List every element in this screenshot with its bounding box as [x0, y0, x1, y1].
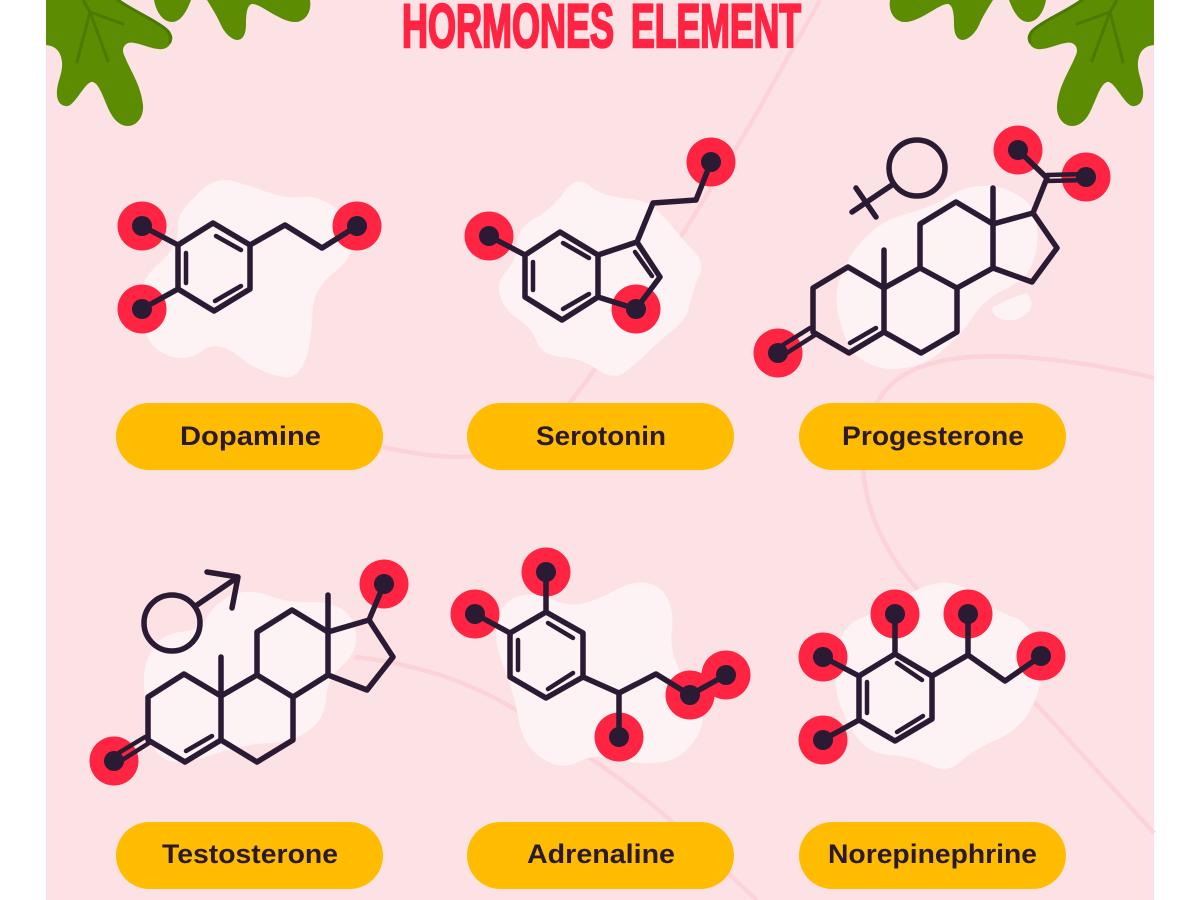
panel: testosterone [90, 560, 408, 889]
background curved lines [355, 0, 1154, 900]
leaves: top left [46, 0, 310, 126]
label pill: progesterone: Progesterone [842, 421, 1024, 451]
blob: serotonin [499, 182, 701, 376]
small blob: progesterone [992, 293, 1031, 320]
label pill: testosterone [116, 822, 383, 889]
female symbol [852, 140, 945, 217]
blob: dopamine [142, 180, 352, 377]
red atoms: testosterone [90, 560, 408, 786]
panel: serotonin [464, 138, 736, 470]
panel: adrenaline [450, 548, 750, 889]
red atoms: progesterone [754, 126, 1110, 378]
leaves: top right [890, 0, 1154, 126]
molecule: testosterone [104, 574, 394, 771]
label pill: progesterone [799, 403, 1066, 470]
molecule: progesterone [768, 140, 1096, 363]
label pill: norepinephrine: Norepinephrine [828, 839, 1037, 869]
red atoms: norepinephrine [798, 590, 1066, 764]
panel: progesterone [754, 126, 1110, 470]
label pill: serotonin [467, 403, 734, 470]
blob: norepinephrine [835, 583, 1041, 769]
blob: adrenaline [496, 582, 702, 766]
molecule: serotonin [479, 152, 721, 320]
red atoms: serotonin [464, 138, 736, 334]
label pill: dopamine [116, 403, 383, 470]
panel: norepinephrine [798, 583, 1066, 889]
label pill: serotonin: Serotonin [536, 421, 666, 451]
panel: dopamine [116, 180, 383, 470]
label pill: dopamine: Dopamine [180, 421, 321, 451]
blob: testosterone [144, 592, 356, 762]
molecule: adrenaline [465, 562, 736, 747]
blob: progesterone [837, 186, 1038, 369]
red atoms: adrenaline [450, 548, 750, 762]
label pill: testosterone: Testosterone [162, 839, 338, 869]
red atoms: dopamine [118, 202, 382, 334]
male symbol [144, 572, 238, 651]
label pill: adrenaline [467, 822, 734, 889]
molecule: dopamine [132, 216, 367, 319]
label pill: norepinephrine [799, 822, 1066, 889]
label pill: adrenaline: Adrenaline [527, 839, 675, 869]
molecule: norepinephrine [813, 604, 1051, 750]
